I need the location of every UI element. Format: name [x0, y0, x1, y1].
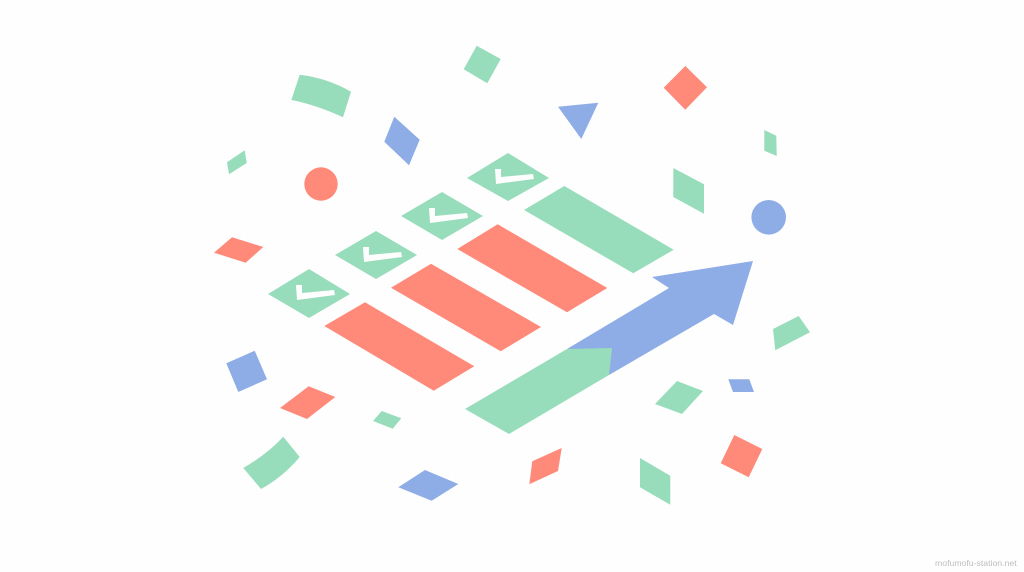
check box row 2 — [335, 231, 417, 279]
red bar row 2 — [391, 264, 541, 351]
confetti: red diamond top right — [664, 66, 707, 110]
confetti: blue quad — [384, 117, 420, 165]
confetti: green diamond top — [464, 46, 501, 83]
confetti: small green top right — [764, 130, 777, 156]
confetti: small green bottom — [373, 411, 401, 429]
confetti: red quad lower right — [721, 435, 762, 477]
arrow head and shaft — [567, 261, 753, 375]
confetti: red quad lower left — [280, 386, 335, 419]
confetti: small blue right — [728, 379, 754, 392]
confetti: green curved strip bottom left — [243, 437, 300, 489]
confetti: blue quad bottom — [398, 470, 458, 501]
green arrow tail — [465, 348, 612, 434]
red bar row 1 — [324, 302, 474, 391]
rising arrow — [465, 261, 753, 434]
red bar row 3 — [457, 224, 607, 312]
check box row 4 — [467, 153, 549, 201]
confetti: green quad bottom — [640, 458, 670, 505]
watermark: mofumofu-station.net — [935, 558, 1017, 568]
confetti: red quad left — [214, 237, 263, 263]
confetti: green curved strip top left — [291, 75, 351, 117]
confetti: green quad right — [673, 168, 704, 214]
confetti shapes — [214, 46, 810, 505]
confetti: red circle — [304, 167, 338, 201]
check box row 1 — [268, 269, 350, 318]
confetti: red quad bottom — [529, 448, 562, 484]
confetti: small green left — [227, 150, 247, 174]
confetti: green quad far right — [773, 316, 810, 350]
green bar row 4 — [524, 186, 674, 273]
confetti: blue quad lower left — [226, 351, 267, 392]
confetti: green quad lower right — [655, 381, 703, 414]
confetti: blue triangle — [558, 103, 598, 139]
check box row 3 — [401, 192, 483, 240]
confetti: blue circle — [751, 200, 786, 235]
checklist — [268, 153, 674, 391]
